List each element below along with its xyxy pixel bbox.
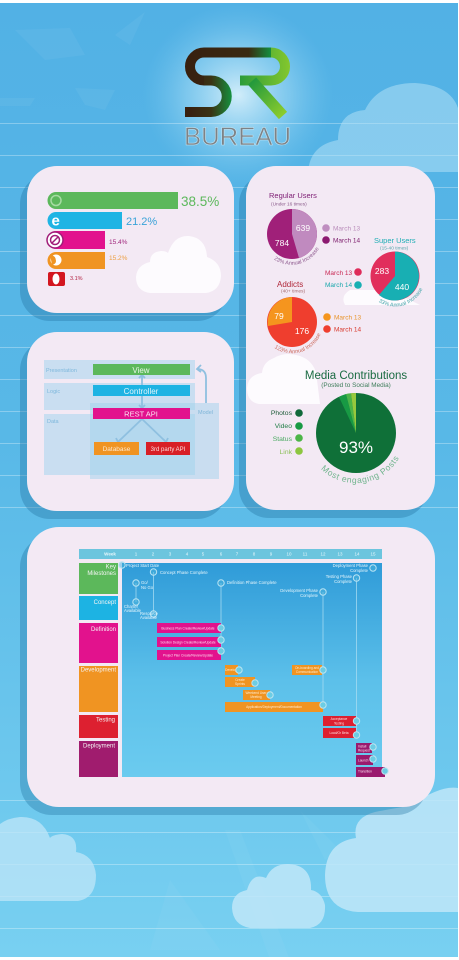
chart: super users: 440 <box>395 282 409 292</box>
panel: architecture <box>20 332 234 519</box>
development task bars: Weekend User <box>245 691 267 695</box>
week header: 14 <box>354 552 360 556</box>
milestone labels: Definition Phase Complete <box>227 580 277 585</box>
week header: 10 <box>286 552 292 556</box>
box: REST API: REST API <box>124 410 158 418</box>
chart: media contributions: Media Contributions <box>305 370 407 382</box>
chart: media contributions: Photos <box>271 410 293 417</box>
development task bars: Communication <box>296 670 318 674</box>
milestone labels: Development Phase <box>280 588 319 593</box>
chart: addicts: 176 <box>295 326 309 336</box>
week header: 15 <box>370 552 376 556</box>
definition task bars: Project Plan Create/Review/Update <box>163 654 213 658</box>
week header: 7 <box>236 552 239 556</box>
phase labels: Development <box>81 668 116 674</box>
chart area <box>122 563 382 777</box>
chart: addicts: Addicts <box>277 280 303 289</box>
bar: Chrome: 38.5% <box>181 194 219 209</box>
milestone labels: Complete <box>334 579 353 584</box>
week header: 5 <box>202 552 205 556</box>
chart: super users: 283 <box>375 266 389 276</box>
phase labels: Milestones <box>87 571 116 577</box>
milestone markers <box>119 562 376 617</box>
week header: 6 <box>220 552 223 556</box>
deployment task bars <box>356 743 388 777</box>
logo <box>184 52 291 151</box>
phase labels: Definition <box>91 627 116 633</box>
bar: Opera: 3.1% <box>70 276 83 282</box>
phase labels: Deployment <box>83 744 115 750</box>
chart: media contributions: 93% <box>339 438 373 457</box>
layer bands <box>44 360 195 475</box>
week header <box>79 549 382 559</box>
milestone labels: Deployment Phase <box>333 563 369 568</box>
bar: Opera <box>48 272 83 286</box>
chart: super users: (15-40 times) <box>380 246 409 252</box>
chart: media contributions: Status <box>273 436 293 443</box>
cloud in panel <box>247 354 320 404</box>
testing task bars: Testing <box>334 722 344 726</box>
chart: addicts <box>267 280 361 354</box>
phase labels: Testing <box>96 718 115 724</box>
chart: super users: March 14 <box>325 282 352 289</box>
box: Database <box>94 442 139 455</box>
milestone labels: Charter <box>124 604 139 609</box>
arrows <box>116 365 206 442</box>
panel: architecture: Presentation <box>46 368 77 374</box>
bar: Safari: 15.4% <box>109 239 128 246</box>
week header: 9 <box>270 552 273 556</box>
week header: 8 <box>253 552 256 556</box>
week header: Week <box>104 552 116 556</box>
milestone lines <box>136 572 356 735</box>
chart: addicts: March 14 <box>334 326 361 334</box>
panel: browser share <box>20 166 234 321</box>
week header: 2 <box>152 552 155 556</box>
chart: media contributions <box>271 370 407 485</box>
box: View <box>93 364 190 375</box>
bar: Internet Explorer: 21.2% <box>126 216 157 228</box>
development task bars: On-boarding and <box>295 666 319 670</box>
panel: gantt <box>20 527 435 815</box>
box: Controller: Controller <box>124 387 159 396</box>
week header: 11 <box>303 552 308 556</box>
week header: 12 <box>320 552 326 556</box>
development task bars <box>225 665 326 712</box>
chart: regular users: 639 <box>296 223 310 233</box>
phase labels: Concept <box>94 600 116 606</box>
bar: Chrome <box>48 192 219 209</box>
milestone labels: Go/ <box>141 580 149 585</box>
box: 3rd party API <box>146 442 190 455</box>
chart: super users: March 13 <box>325 270 352 277</box>
testing task bars: Acceptance <box>331 717 348 721</box>
milestone labels: Complete <box>350 568 369 573</box>
week header: 1 <box>135 552 138 556</box>
bar: Internet Explorer: e <box>52 212 60 230</box>
testing task bars: Load/Or Beta <box>330 731 349 735</box>
cloud: bottom right <box>325 788 458 912</box>
milestone labels <box>124 563 369 620</box>
chart: regular users: March 13 <box>333 226 360 232</box>
chart: addicts: (40+ times) <box>281 288 306 294</box>
milestone labels: Project Start Date <box>126 563 160 568</box>
week header: 13 <box>337 552 343 556</box>
box: Controller <box>93 385 190 396</box>
model box: Model <box>198 410 213 416</box>
bar: Firefox: 15.2% <box>109 255 128 262</box>
box: REST API <box>93 408 190 419</box>
chart: regular users: (Under 16 times) <box>271 202 307 208</box>
chart: addicts: 79 <box>274 311 284 321</box>
chart: regular users: Regular Users <box>269 191 317 200</box>
chart: regular users: March 14 <box>333 238 360 244</box>
chart: super users <box>325 236 422 307</box>
milestone labels: Testing Phase <box>326 574 353 579</box>
week header: 4 <box>186 552 189 556</box>
definition task bars: Business Plan Create/Review/Update <box>161 626 215 630</box>
definition task bars <box>157 623 224 660</box>
panel: architecture: Data <box>47 419 60 425</box>
deployment task bars: Transition <box>358 770 372 774</box>
milestone labels: Complete <box>300 593 319 598</box>
chart: regular users <box>267 191 360 265</box>
development task bars: Develop <box>225 668 237 672</box>
testing task bars <box>323 716 360 738</box>
bar: Internet Explorer <box>48 212 157 230</box>
cloud: bottom centre <box>232 864 325 928</box>
logo wordmark: BUREAU <box>184 123 291 151</box>
faint cloud behind super users <box>343 290 420 305</box>
milestone labels: No Go <box>141 585 154 590</box>
box: Database: Database <box>103 446 131 453</box>
chart: super users: Super Users <box>374 236 416 245</box>
milestone labels: Available <box>140 615 158 620</box>
model box <box>90 403 219 479</box>
box: 3rd party API: 3rd party API <box>151 447 186 453</box>
chart: media contributions: Most engaging Posts <box>321 456 398 485</box>
week header: 3 <box>169 552 172 556</box>
deployment task bars: Request <box>358 748 370 752</box>
milestone labels: Available <box>124 608 142 613</box>
bar: Safari <box>47 231 128 249</box>
cloud: bottom left <box>0 817 96 901</box>
phase labels <box>79 563 118 777</box>
chart: media contributions: Video <box>275 423 292 430</box>
deployment task bars: Install <box>358 744 367 748</box>
cloud: top right <box>308 83 458 172</box>
development task bars: Create <box>235 678 245 682</box>
chart: media contributions: Link <box>280 449 293 456</box>
chart: regular users: 23% Annual Increase <box>274 248 318 265</box>
development task bars: Meeting <box>250 695 262 699</box>
panel: architecture: Logic <box>47 389 60 395</box>
chart: media contributions: (Posted to Social Media) <box>321 382 391 389</box>
phase labels: Key <box>106 564 116 570</box>
box: View: View <box>132 366 150 375</box>
chart: addicts: 123% Annual Increase <box>274 334 320 354</box>
chart: super users: 33% Annual Increase <box>379 288 422 307</box>
deployment task bars: Launch <box>358 758 369 762</box>
development task bars: Application/Deployment/Documentation <box>246 705 302 709</box>
bar: Firefox <box>48 252 128 269</box>
definition task bars: Solution Design Create/Review/Update <box>160 640 216 644</box>
cloud in panel <box>136 236 221 293</box>
development task bars: Sprints <box>235 682 245 686</box>
chart: addicts: March 13 <box>334 314 361 322</box>
chart: regular users: 784 <box>275 238 289 248</box>
milestone labels: Concept Phase Complete <box>160 570 208 575</box>
panel: users <box>239 166 435 518</box>
milestone labels: Resource <box>140 611 159 616</box>
